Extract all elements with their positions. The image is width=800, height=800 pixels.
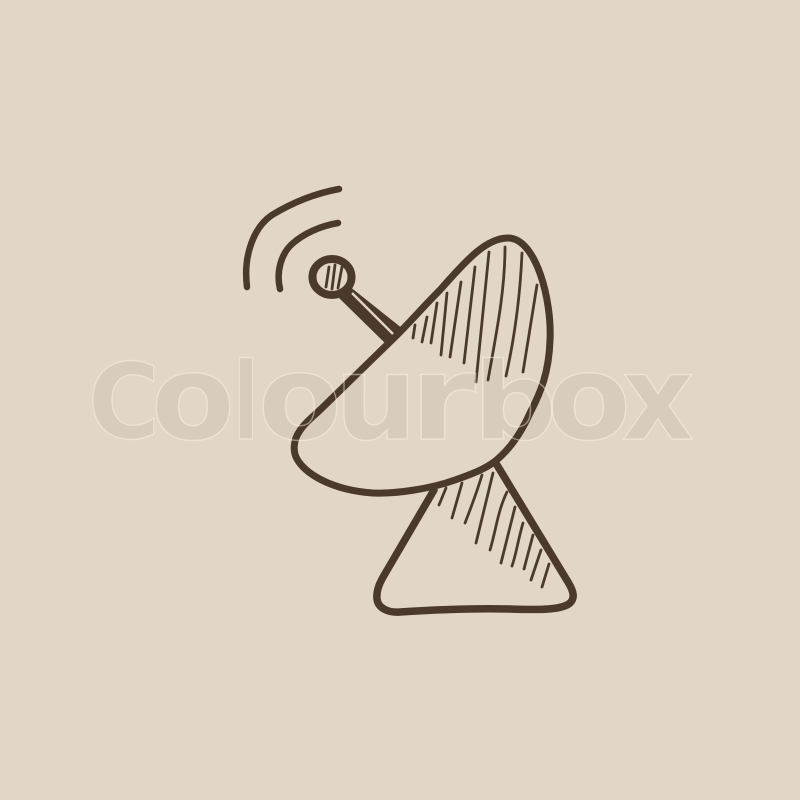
watermark: Colourbox: o xyxy=(258,329,342,467)
watermark: Colourbox: o xyxy=(151,329,235,467)
watermark: Colourbox: l xyxy=(233,341,259,465)
watermark: Colourbox: o xyxy=(547,329,631,467)
watermark: Colourbox xyxy=(88,329,694,467)
icon: dish bowl xyxy=(294,238,550,493)
icon: feed horn xyxy=(312,259,352,295)
icon: inner signal wave xyxy=(279,223,338,289)
icon: satellite dish xyxy=(246,189,573,612)
watermark: Colourbox: u xyxy=(335,329,417,467)
icon: stand triangle xyxy=(377,465,573,612)
watermark: Colourbox: C xyxy=(88,341,160,463)
icon: dish shading xyxy=(413,247,537,382)
watermark: Colourbox: r xyxy=(410,329,476,467)
icon: stand shading xyxy=(439,473,549,587)
watermark: Colourbox: x xyxy=(622,329,694,467)
watermark: Colourbox: b xyxy=(473,341,557,465)
icon: feed arm xyxy=(337,286,403,346)
icon: outer signal wave xyxy=(246,189,339,287)
